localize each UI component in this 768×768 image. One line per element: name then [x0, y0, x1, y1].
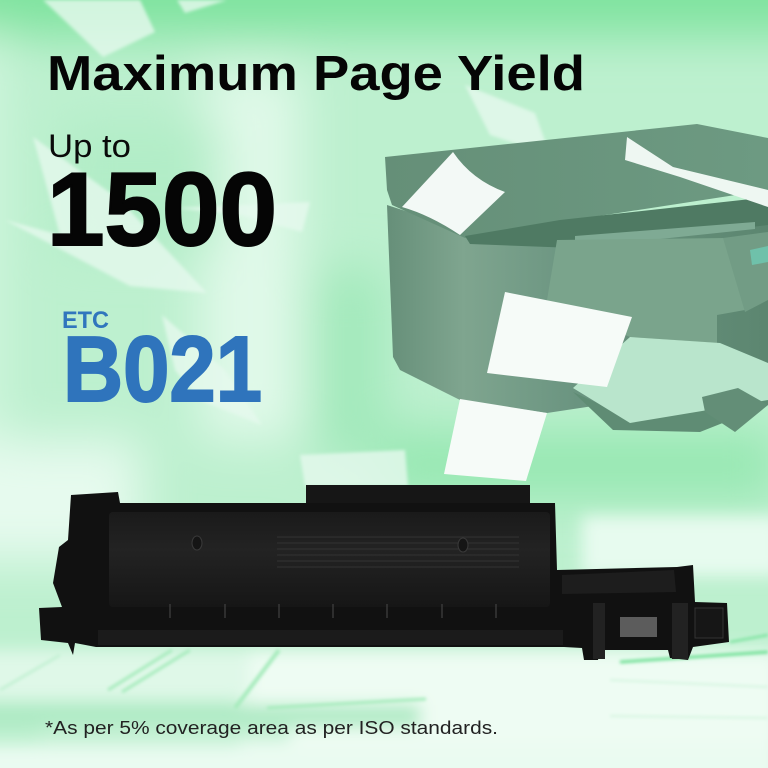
drum housing: [109, 512, 550, 607]
paper sheets over printer: [402, 137, 768, 481]
output tray strip: [575, 222, 755, 248]
vent ribs: [277, 537, 519, 567]
tray base: [573, 392, 768, 432]
toner cartridge: [39, 485, 729, 660]
paper stack lines, background: [0, 635, 768, 718]
footnote: *As per 5% coverage area as per ISO standards.: [45, 718, 498, 738]
label: up to: Up to: [48, 128, 131, 164]
lower channel: [98, 630, 563, 645]
page yield number: 1500: [47, 152, 277, 268]
foam roller: [620, 617, 657, 637]
paper in tray: [573, 337, 768, 423]
printer: [385, 124, 768, 432]
tick marks: [170, 604, 496, 618]
title: Maximum Page Yield: [47, 47, 585, 101]
falling paper sheets, background: [5, 0, 550, 486]
dark slot: [465, 198, 768, 248]
model code: B021: [63, 317, 262, 421]
top tab: [306, 485, 530, 510]
screw holes: [192, 536, 468, 552]
roller unit window: [562, 570, 676, 594]
printer lid: [385, 124, 768, 238]
display: [750, 246, 768, 265]
label: ETC: ETC: [62, 307, 109, 334]
printer body: [387, 205, 768, 430]
control panel: [723, 232, 768, 312]
gears: [593, 603, 605, 659]
front inset: [547, 238, 745, 343]
right end bracket: [695, 608, 723, 638]
tray extender: [702, 388, 768, 432]
cartridge silhouette: [39, 492, 729, 660]
